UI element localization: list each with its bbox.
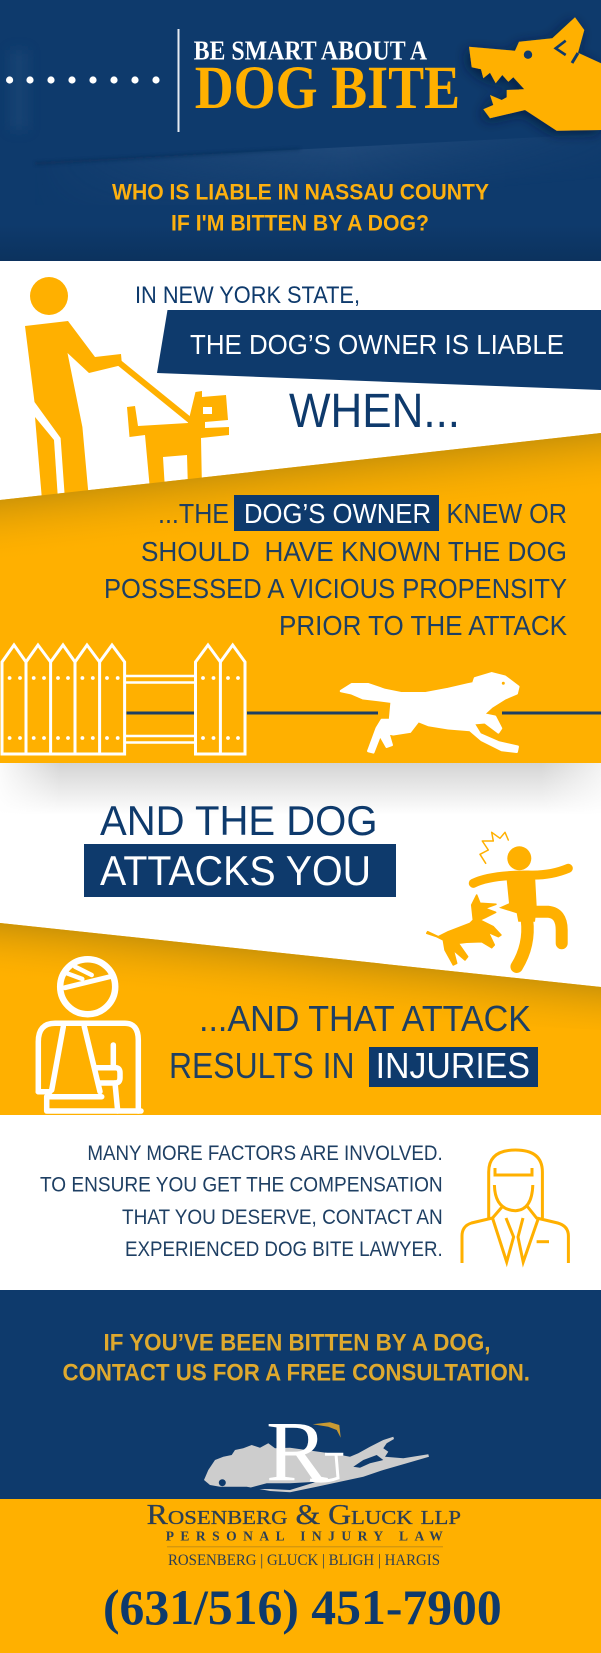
panel: call to action [0,1290,601,1499]
advice text [40,1141,443,1261]
heading: and the dog: AND THE DOG [100,797,378,844]
call to action text [62,1330,530,1387]
injury text [169,998,538,1087]
panel: owner is liable [0,261,601,511]
title: DOG BITE [195,55,460,122]
knowledge text: KNEW OR [446,498,567,529]
call to action text: CONTACT US FOR A FREE CONSULTATION. [62,1360,530,1387]
knowledge text: ...THE [158,498,229,529]
panel: header [0,0,601,261]
advice text: EXPERIENCED DOG BITE LAWYER. [125,1237,443,1261]
phone number: (631/516) 451-7900 [103,1579,502,1635]
firm name: ROSENBERG | GLUCK | BLIGH | HARGIS [168,1552,440,1569]
icon: running dog [341,673,518,752]
icon: lawyer [462,1150,568,1263]
firm name: Rosenberg & Gluck llp [147,1500,461,1531]
knowledge text: PRIOR TO THE ATTACK [279,610,567,641]
when heading: WHEN... [289,385,460,438]
icon: person walking dog [25,277,229,500]
panel: injuries [0,923,601,1115]
advice text: TO ENSURE YOU GET THE COMPENSATION [40,1173,443,1197]
panel: dog attacks [0,763,601,967]
injury text: ...AND THAT ATTACK [199,998,531,1039]
dotted line [6,76,160,84]
knowledge text: POSSESSED A VICIOUS PROPENSITY [104,573,567,604]
icon: snarling dog head [469,17,601,131]
panel: owner knew [0,433,601,763]
firm name [147,1500,461,1569]
question heading [112,180,489,236]
logo: Long Island map with monogram [204,1403,429,1499]
knowledge text: SHOULD HAVE KNOWN THE DOG [141,536,567,567]
icon: dog attacking person [427,832,568,967]
injury text: RESULTS IN [169,1045,354,1086]
panel: firm details [0,1499,601,1653]
panel: contact a lawyer [0,1115,601,1290]
question heading: IF I'M BITTEN BY A DOG? [171,211,429,236]
icon: broken fence [2,645,601,754]
knowledge text: DOG’S OWNER [244,498,431,529]
logo: Long Island map with monogram: R [266,1403,329,1499]
intro text: IN NEW YORK STATE, [135,282,360,309]
title: BE SMART ABOUT A [194,36,428,66]
banner: the dog's owner is liable [157,310,601,390]
call to action text: IF YOU’VE BEEN BITTEN BY A DOG, [104,1330,490,1357]
icon: injured man with sling [38,959,141,1111]
question heading: WHO IS LIABLE IN NASSAU COUNTY [112,180,489,204]
banner: attacks you: ATTACKS YOU [100,847,371,894]
advice text: THAT YOU DESERVE, CONTACT AN [122,1205,443,1229]
advice text: MANY MORE FACTORS ARE INVOLVED. [87,1141,443,1165]
injury text: INJURIES [376,1045,530,1086]
knowledge text [104,495,567,641]
banner: the dog's owner is liable: THE DOG’S OWNER IS LIABLE [190,329,564,360]
firm name: PERSONAL INJURY LAW [166,1529,443,1544]
